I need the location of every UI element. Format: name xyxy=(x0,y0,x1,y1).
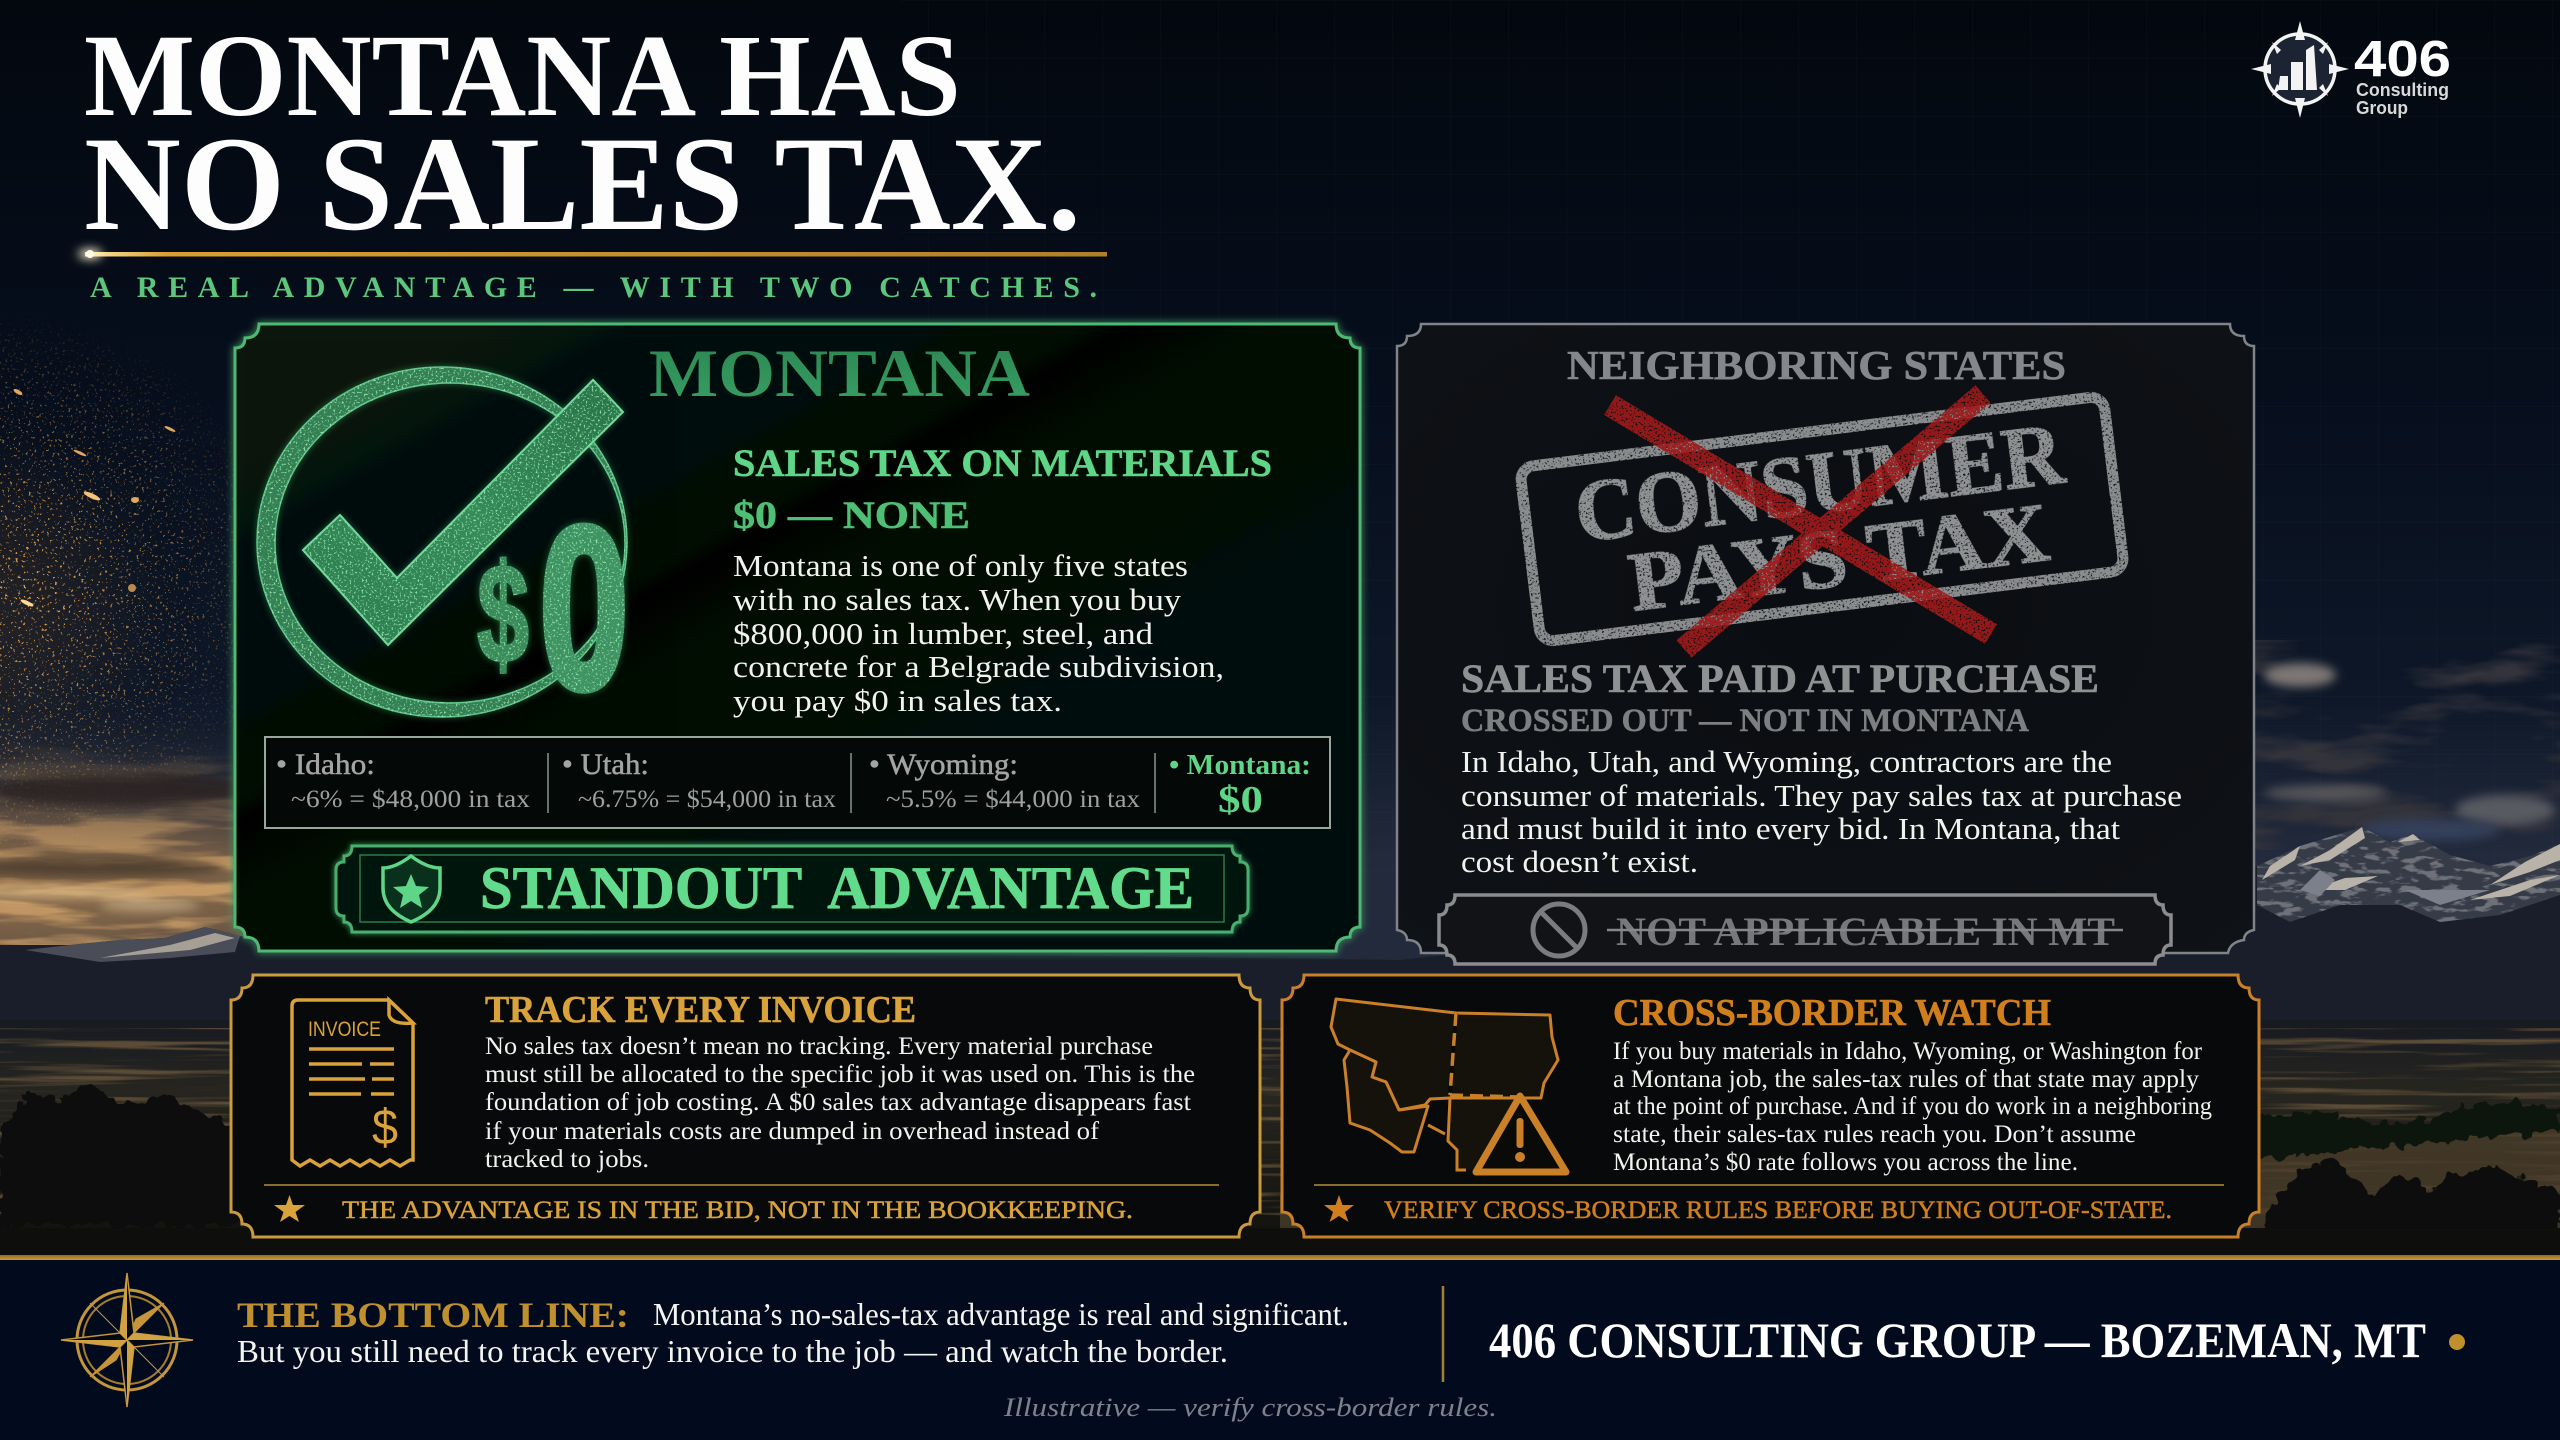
text block: neighboring body: In Idaho, Utah, and Wyoming, contractors are the xyxy=(1461,744,2112,779)
title xyxy=(84,10,1081,259)
title: MONTANA HAS xyxy=(84,10,961,141)
text block: cross-border body: state, their sales-tax rules reach you. Don’t assume xyxy=(1613,1119,2136,1148)
text block: cross-border body: a Montana job, the sales-tax rules of that state may apply xyxy=(1613,1064,2199,1093)
heading: the bottom line: THE BOTTOM LINE: xyxy=(237,1295,629,1335)
Utah xyxy=(562,748,837,813)
text block: neighboring body: consumer of materials. They pay sales tax at purchase xyxy=(1461,778,2182,813)
comparison table xyxy=(265,737,1330,828)
icon: prohibited sign xyxy=(1533,904,1585,956)
icon: shield with star xyxy=(383,856,440,922)
Wyoming: • Wyoming: xyxy=(869,748,1018,781)
Montana: $0 xyxy=(1218,779,1263,821)
icon: compass with rising bars xyxy=(2251,21,2349,118)
Wyoming: ~5.5% = $44,000 in tax xyxy=(886,786,1141,813)
heading: neighboring states: NEIGHBORING STATES xyxy=(1567,342,2066,388)
icon: green checkmark with $0: $ xyxy=(477,535,529,692)
icon: gold compass rose xyxy=(61,1273,193,1407)
text block: cross-border body: at the point of purchase. And if you do work in a neighboring xyxy=(1613,1091,2212,1120)
icon: green checkmark with $0 xyxy=(257,367,629,738)
footer band xyxy=(0,1255,2560,1440)
panel: track every invoice xyxy=(231,975,1260,1237)
banner: standout advantage xyxy=(336,846,1248,932)
text block: cross-border body: If you buy materials in Idaho, Wyoming, or Washington for xyxy=(1613,1036,2202,1065)
text block: invoice body: tracked to jobs. xyxy=(485,1144,649,1173)
text block: bottom line: Montana’s no-sales-tax advantage is real and significant. xyxy=(653,1296,1349,1332)
Idaho: • Idaho: xyxy=(276,748,375,781)
panel: cross-border watch xyxy=(1282,975,2259,1237)
text block: invoice body: No sales tax doesn’t mean no tracking. Every material purchase xyxy=(485,1031,1153,1060)
text block: invoice body xyxy=(485,1031,1195,1173)
icon: invoice: $ xyxy=(372,1099,398,1155)
Utah: ~6.75% = $54,000 in tax xyxy=(578,786,837,813)
icon: red cross-out xyxy=(1610,394,1991,649)
stamp: consumer pays tax xyxy=(1519,396,2125,642)
banner: not applicable in MT: NOT APPLICABLE IN MT xyxy=(1616,909,2115,954)
panel frame xyxy=(1397,324,2254,953)
icon: invoice xyxy=(292,1000,413,1166)
banner: not applicable in MT xyxy=(1439,895,2171,964)
subheading: crossed out: CROSSED OUT — NOT IN MONTANA xyxy=(1461,703,2029,739)
logo: 406 Consulting Group: Group xyxy=(2356,98,2408,118)
Utah: • Utah: xyxy=(562,748,649,781)
Montana xyxy=(1169,750,1311,821)
text block: Montana body xyxy=(733,548,1224,718)
text block: Montana body: Montana is one of only five states xyxy=(733,548,1188,583)
callout: advantage in the bid: THE ADVANTAGE IS IN THE BID, NOT IN THE BOOKKEEPING. xyxy=(342,1197,1133,1224)
value: $0 none: $0 — NONE xyxy=(733,494,970,537)
text block: Montana body: you pay $0 in sales tax. xyxy=(733,683,1062,718)
text block: bottom line: But you still need to track every invoice to the job — and watch the border. xyxy=(237,1333,1228,1369)
callout: verify cross-border rules: VERIFY CROSS-BORDER RULES BEFORE BUYING OUT-OF-STATE. xyxy=(1384,1197,2172,1224)
icon: regional map with warning triangle xyxy=(1331,999,1566,1172)
icon: invoice: INVOICE xyxy=(308,1018,381,1041)
icon: star xyxy=(1324,1195,1354,1222)
panel frame xyxy=(1282,975,2259,1237)
background: night sky, sunset, mountains and plains xyxy=(0,124,2560,1255)
heading: track every invoice: TRACK EVERY INVOICE xyxy=(485,989,916,1031)
text block: invoice body: foundation of job costing. A $0 sales tax advantage disappears fast xyxy=(485,1087,1191,1116)
heading: Montana: MONTANA xyxy=(649,335,1030,411)
logo: 406 Consulting Group: Consulting xyxy=(2356,80,2449,100)
heading: sales tax on materials: SALES TAX ON MATERIALS xyxy=(733,442,1272,485)
heading: cross-border watch: CROSS-BORDER WATCH xyxy=(1613,992,2051,1034)
heading: sales tax paid at purchase: SALES TAX PAID AT PURCHASE xyxy=(1461,656,2099,701)
text block: Montana body: $800,000 in lumber, steel, and xyxy=(733,616,1154,651)
text block: neighboring body xyxy=(1461,744,2182,879)
banner: standout advantage: STANDOUT ADVANTAGE xyxy=(480,855,1194,921)
Idaho xyxy=(276,748,531,813)
title underline xyxy=(78,249,1107,259)
icon: star xyxy=(274,1195,305,1222)
logo: 406 Consulting Group: 406 xyxy=(2354,30,2451,87)
stamp: consumer pays tax: PAYS TAX xyxy=(1624,486,2054,630)
text block: cross-border body xyxy=(1613,1036,2212,1176)
panel frame xyxy=(231,975,1260,1237)
logo: 406 Consulting Group xyxy=(2251,21,2451,118)
text block: cross-border body: Montana’s $0 rate follows you across the line. xyxy=(1613,1147,2078,1176)
icon: green checkmark with $0: 0 xyxy=(539,479,629,738)
text block: bottom line xyxy=(237,1296,1349,1369)
panel: Montana xyxy=(235,324,1360,951)
panel dust texture xyxy=(245,340,675,735)
panel frame xyxy=(235,324,1360,951)
footnote: Illustrative — verify cross-border rules. xyxy=(1003,1393,1497,1422)
text block: invoice body: if your materials costs are dumped in overhead instead of xyxy=(485,1116,1100,1145)
text block: neighboring body: and must build it into every bid. In Montana, that xyxy=(1461,811,2120,846)
text block: Montana body: with no sales tax. When you buy xyxy=(733,582,1182,617)
subtitle: A REAL ADVANTAGE — WITH TWO CATCHES. xyxy=(90,271,1106,304)
text block: invoice body: must still be allocated to the specific job it was used on. This is the xyxy=(485,1059,1195,1088)
text block: neighboring body: cost doesn’t exist. xyxy=(1461,844,1698,879)
stamp: consumer pays tax: CONSUMER xyxy=(1570,405,2070,562)
Montana: • Montana: xyxy=(1169,750,1311,781)
accent dot xyxy=(2449,1334,2465,1350)
text block: Montana body: concrete for a Belgrade subdivision, xyxy=(733,649,1224,684)
Wyoming xyxy=(869,748,1141,813)
title: NO SALES TAX. xyxy=(84,110,1081,259)
panel: neighboring states xyxy=(1397,324,2254,964)
brand line: 406 CONSULTING GROUP — BOZEMAN, MT xyxy=(1489,1312,2426,1368)
Idaho: ~6% = $48,000 in tax xyxy=(291,786,531,813)
